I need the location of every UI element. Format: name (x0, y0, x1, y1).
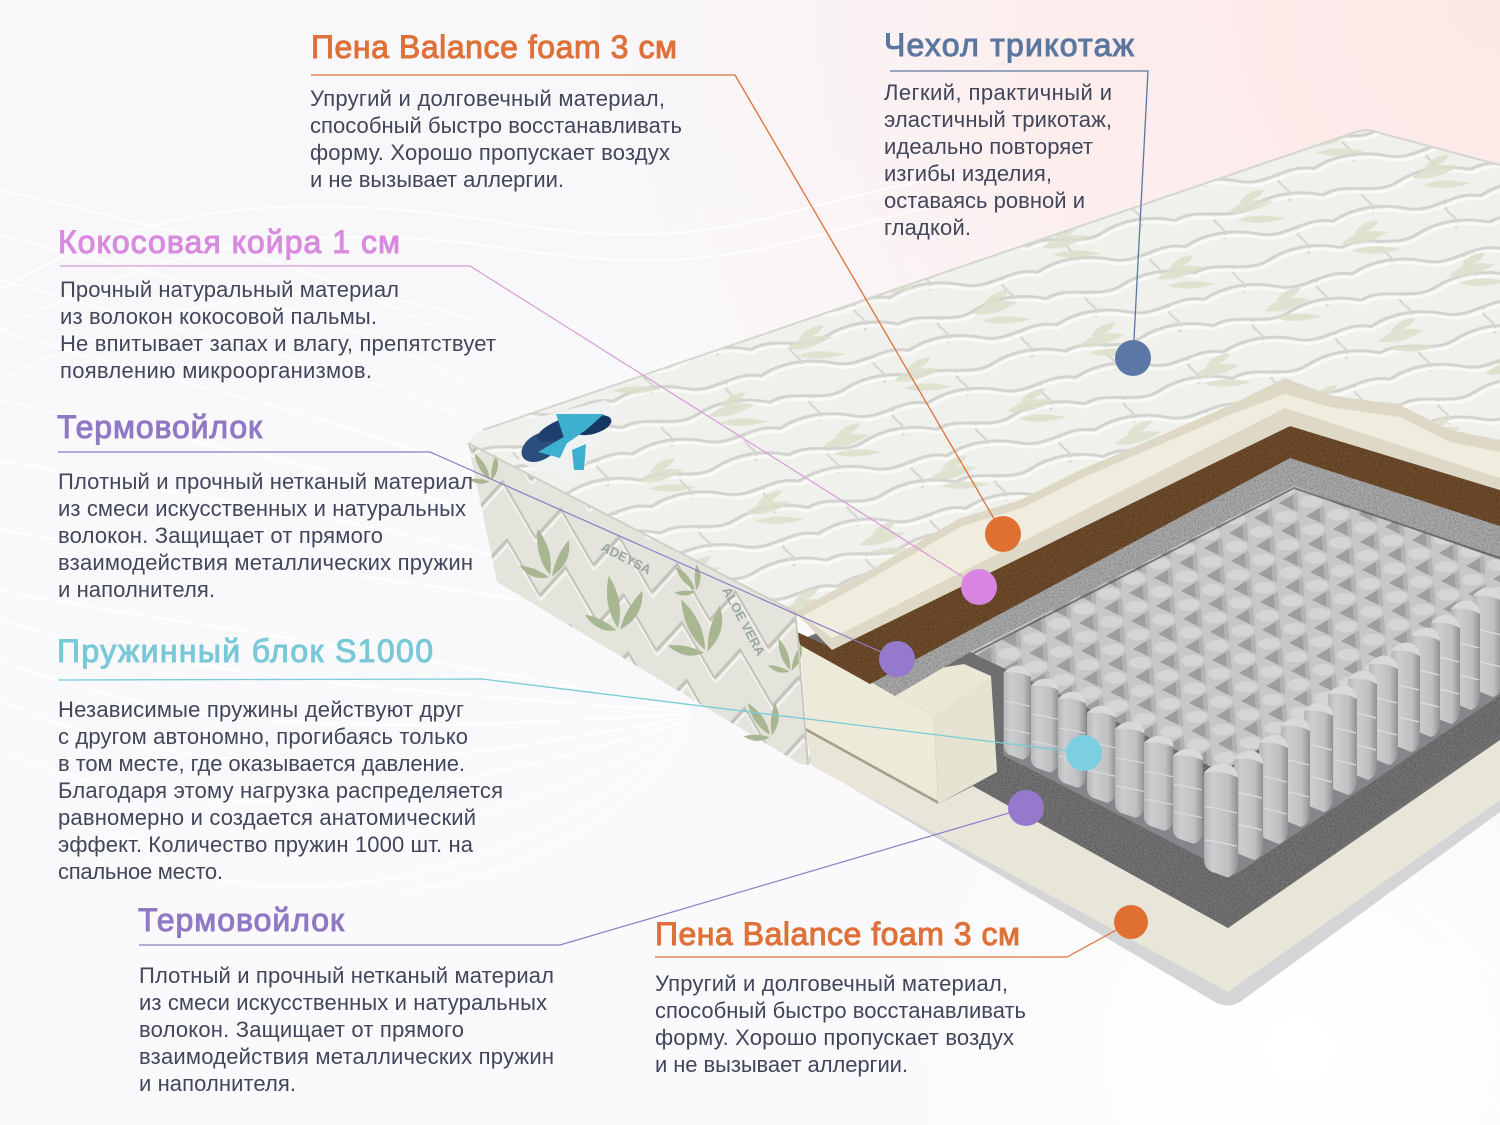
foam block side (800, 640, 997, 804)
heading: cover: Чехол трикотаж (884, 27, 1135, 63)
heading: foam bottom: Пена Balance foam 3 см (655, 916, 1020, 952)
text block: cover (884, 80, 1112, 240)
text block: cover: Легкий, практичный и (884, 80, 1112, 105)
text block: foam bottom: и не вызывает аллергии. (655, 1052, 908, 1077)
spring block (970, 484, 1500, 877)
heading: spring: Пружинный блок S1000 (57, 633, 433, 669)
marker dot: felt upper (879, 641, 915, 677)
text block: spring: с другом автономно, прогибаясь только (58, 724, 468, 749)
text block: foam: Упругий и долговечный материал, (310, 86, 665, 111)
text block: felt lower: из смеси искусственных и натуральных (139, 990, 547, 1015)
text block: cover: эластичный трикотаж, (884, 107, 1112, 132)
callout: thermal felt lower (138, 790, 1044, 1096)
text block: coir: Прочный натуральный материал (60, 277, 399, 302)
leader line: spring (58, 679, 1084, 753)
leader line: foam (311, 75, 1003, 534)
text block: coir: появлению микроорганизмов. (60, 358, 372, 383)
callout: knit cover (884, 27, 1151, 376)
interior backfill (800, 440, 1500, 928)
text block: felt lower: взаимодействия металлических пружин (139, 1044, 554, 1069)
text block: spring: в том месте, где оказывается давление. (58, 751, 465, 776)
marker dot: spring (1066, 735, 1102, 771)
leader line: felt lower (139, 808, 1026, 945)
text block: foam bottom: способный быстро восстанавливать (655, 998, 1026, 1023)
top foam layer (795, 378, 1500, 650)
text block: cover: изгибы изделия, (884, 161, 1052, 186)
coconut coir layer (797, 426, 1500, 684)
text block: cover: гладкой. (884, 215, 971, 240)
heading: felt lower: Термовойлок (138, 902, 345, 938)
text block: foam: и не вызывает аллергии. (310, 167, 564, 192)
lower felt (973, 590, 1500, 928)
text block: coir (60, 277, 496, 383)
brand tag (516, 400, 616, 482)
heading: felt upper: Термовойлок (57, 409, 263, 445)
text block: felt lower: Плотный и прочный нетканый материал (139, 963, 554, 988)
quilted side panel (459, 443, 808, 765)
callout: thermal felt upper (57, 409, 915, 677)
leader line: foam bottom (655, 922, 1131, 957)
text block: felt upper: Плотный и прочный нетканый материал (58, 469, 473, 494)
text block: spring: спальное место. (58, 859, 223, 884)
bottom foam layer (805, 728, 1500, 992)
text block: coir: Не впитывает запах и влагу, препятствует (60, 331, 496, 356)
callout: foam bottom (655, 905, 1148, 1077)
text block: felt upper: из смеси искусственных и натуральных (58, 496, 466, 521)
text block: spring: Благодаря этому нагрузка распределяется (58, 778, 503, 803)
text block: cover: оставаясь ровной и (884, 188, 1085, 213)
heading: foam: Пена Balance foam 3 см (311, 29, 677, 65)
text block: felt upper: взаимодействия металлических пружин (58, 550, 473, 575)
marker dot: felt lower (1008, 790, 1044, 826)
text block: foam bottom: форму. Хорошо пропускает воздух (655, 1025, 1014, 1050)
spring tops (970, 484, 1500, 772)
bottom cover edge (808, 745, 1500, 1006)
quilted side panel: ALOE VERA (719, 584, 768, 659)
marker dot: coir (961, 569, 997, 605)
text block: foam: способный быстро восстанавливать (310, 113, 682, 138)
text block: spring: Независимые пружины действуют друг (58, 697, 464, 722)
text block: foam bottom: Упругий и долговечный материал, (655, 971, 1008, 996)
text block: felt lower (139, 963, 554, 1096)
text block: spring: равномерно и создается анатомический (58, 805, 476, 830)
text block: spring: эффект. Количество пружин 1000 шт. на (58, 832, 474, 857)
quilted side panel: ADEYSA (599, 539, 654, 578)
callout: spring block (57, 633, 1102, 884)
text block: coir: из волокон кокосовой пальмы. (60, 304, 377, 329)
callout: coconut coir (58, 224, 997, 605)
text block: felt upper: волокон. Защищает от прямого (58, 523, 383, 548)
marker dot: foam bottom (1114, 905, 1148, 939)
text block: felt lower: и наполнителя. (139, 1071, 296, 1096)
quilted top cover (468, 130, 1500, 612)
text block: felt upper: и наполнителя. (58, 577, 215, 602)
mattress illustration (459, 130, 1500, 1006)
leader line: felt upper (58, 452, 897, 659)
marker dot: foam (985, 516, 1021, 552)
text block: felt lower: волокон. Защищает от прямого (139, 1017, 464, 1042)
leader line: coir (60, 266, 979, 587)
text block: foam bottom (655, 971, 1026, 1077)
text block: foam: форму. Хорошо пропускает воздух (310, 140, 670, 165)
text block: cover: идеально повторяет (884, 134, 1093, 159)
leader line: cover (890, 71, 1148, 358)
text block: spring (58, 697, 503, 884)
callout: foam top (310, 29, 1021, 552)
heading: coir: Кокосовая койра 1 см (58, 224, 400, 260)
text block: foam (310, 86, 682, 192)
upper felt layer (867, 456, 1500, 696)
text block: felt upper (58, 469, 473, 602)
marker dot: cover (1115, 340, 1151, 376)
